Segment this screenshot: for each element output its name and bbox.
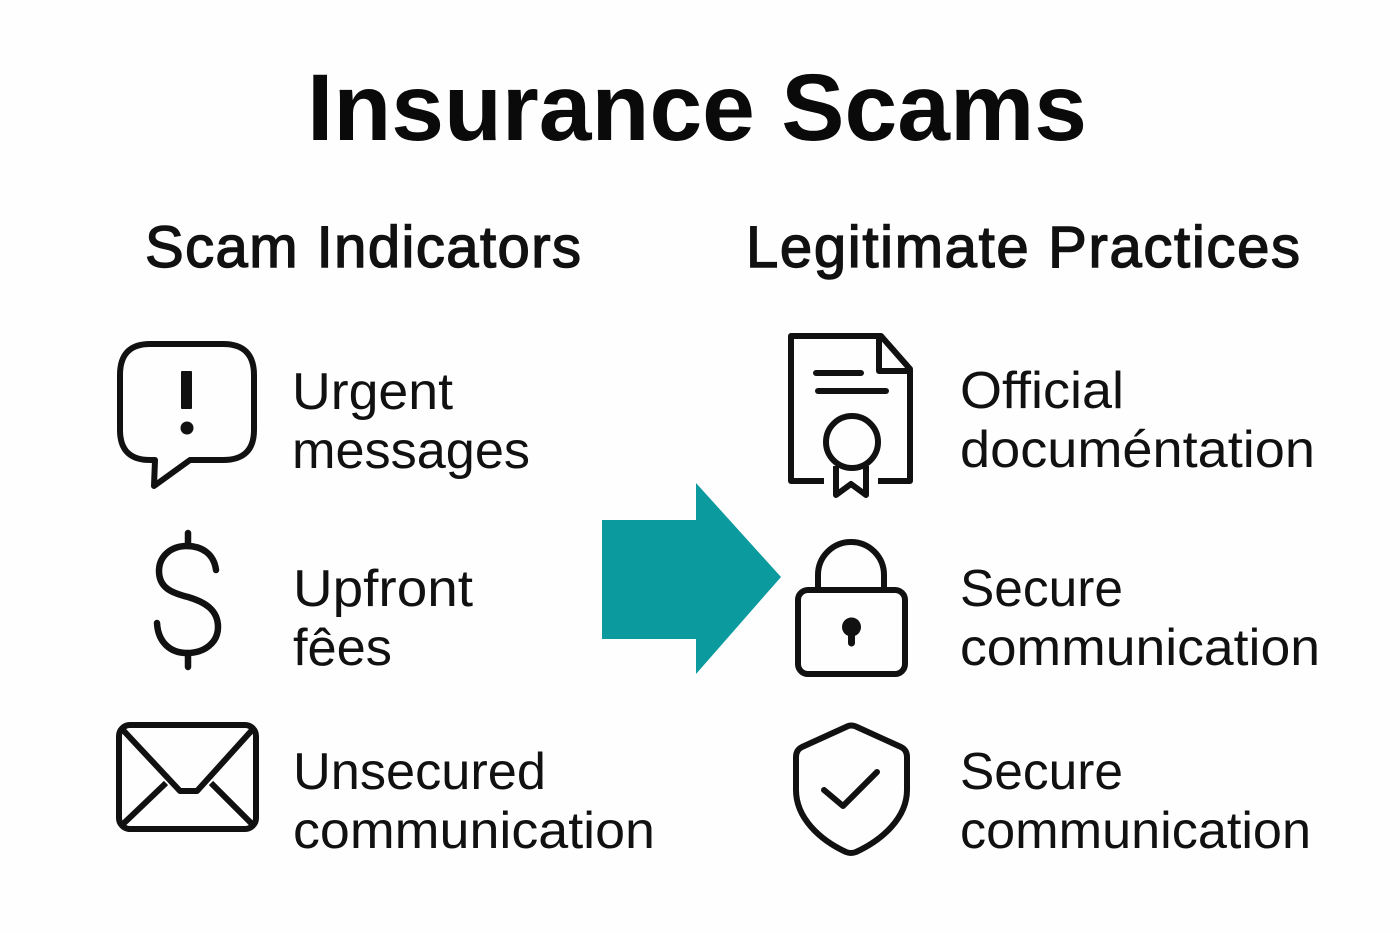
title: Insurance Scams — [307, 55, 1087, 161]
text: secure communication: communication — [960, 619, 1320, 677]
text: secure communication: Secure — [960, 560, 1123, 618]
icon: shield with check — [796, 726, 907, 853]
text: upfront fees: fêes — [293, 619, 392, 677]
arrow — [602, 483, 781, 674]
heading: scam indicators: Scam Indicators — [145, 215, 581, 280]
text: secure communication (second): Secure — [960, 743, 1123, 801]
text: official documentation: Official — [960, 362, 1124, 420]
icon: official document — [791, 336, 910, 495]
text: official documentation: documéntation — [960, 421, 1315, 479]
text: unsecured communication: Unsecured — [293, 743, 546, 801]
text: urgent messages: Urgent — [292, 363, 454, 421]
text: unsecured communication: communication — [293, 802, 655, 860]
text: secure communication (second): communication — [960, 802, 1311, 860]
heading: legitimate practices: Legitimate Practices — [746, 215, 1300, 280]
text: upfront fees: Upfront — [293, 560, 474, 618]
icon: dollar sign — [157, 533, 218, 667]
icon: envelope — [119, 725, 256, 829]
icon: urgent message bubble — [120, 344, 254, 486]
text: urgent messages: messages — [292, 422, 530, 480]
icon: padlock — [798, 542, 905, 674]
